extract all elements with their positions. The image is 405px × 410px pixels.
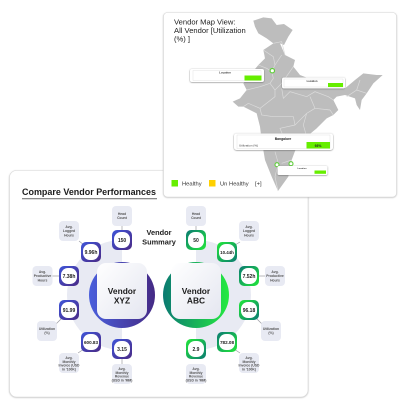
metric: monthly revenue XYZ: [112, 339, 132, 384]
vendor ABC hub: ABC: [187, 296, 205, 306]
metric: logged hours XYZ: 9.96h: [85, 250, 97, 256]
metric: head count XYZ: 150: [118, 238, 126, 244]
legend: [+]: [255, 182, 262, 188]
metric: logged hours ABC: Hours: [244, 233, 254, 237]
metric: logged hours ABC: 10.44h: [220, 250, 234, 255]
heading: vendor summary: Summary: [142, 238, 177, 246]
metric: utilization ABC: 96.18: [243, 308, 255, 314]
tooltip: south location: [278, 166, 328, 175]
connector lines: [52, 225, 266, 365]
metric: monthly invoice XYZ: 600.83: [84, 340, 98, 345]
map of India: [233, 17, 383, 191]
metric: logged hours ABC: Logged: [243, 229, 255, 233]
metric: utilization XYZ: Utilization: [39, 327, 55, 331]
legend: Un Healthy: [220, 182, 249, 188]
metric: monthly revenue ABC: [186, 339, 206, 384]
metric: productive hours XYZ: Hours: [38, 278, 48, 282]
metric: monthly revenue XYZ: 3.15: [117, 347, 127, 353]
metric: productive hours ABC: 7.52h: [243, 274, 255, 280]
metric: monthly invoice XYZ: Monthly: [62, 360, 76, 364]
heading: compare vendor performances: Compare Vendor Performances: [22, 187, 156, 198]
metric: monthly invoice ABC: 782.08: [220, 340, 234, 345]
heading: vendor map view: (%) ]: [174, 35, 190, 44]
metric: head count ABC: [186, 206, 206, 250]
tooltip: bangalore: Utilization (%): [239, 144, 258, 148]
metric: monthly revenue XYZ: Monthly: [116, 371, 129, 375]
metric: utilization ABC: (%): [268, 331, 274, 335]
metric: head count ABC: Head: [192, 212, 200, 216]
metric: monthly revenue XYZ: Avg.: [118, 367, 126, 371]
metric: productive hours ABC: Hours: [270, 278, 280, 282]
metric: monthly revenue ABC: Revenue: [189, 375, 203, 379]
panel: vendor map view: [164, 12, 396, 197]
tooltip: south location: Location: [297, 167, 307, 170]
metric: monthly revenue XYZ: Revenue: [115, 375, 129, 379]
metric: utilization XYZ: (%): [44, 331, 50, 335]
tooltip: location right: [282, 78, 345, 88]
metric: monthly revenue ABC: Avg.: [192, 367, 200, 371]
heading: vendor map view: Vendor Map View:: [174, 18, 236, 26]
panel: compare vendor performances: [10, 170, 308, 397]
metric: logged hours XYZ: Logged: [63, 229, 75, 233]
metric: utilization ABC: [239, 300, 281, 341]
metric: head count XYZ: [112, 206, 132, 250]
gear backdrop left: [67, 240, 122, 350]
metric: productive hours XYZ: 7.38h: [63, 274, 75, 280]
metric: utilization ABC: Utilization: [263, 327, 279, 331]
metric: monthly invoice XYZ: in '100K): [62, 367, 76, 371]
metric: monthly invoice ABC: in '100K): [242, 367, 256, 371]
metric: monthly invoice XYZ: Avg.: [65, 356, 73, 360]
tooltip: bangalore: Bangalore: [275, 137, 291, 141]
tooltip: location left: [190, 69, 264, 82]
metric: logged hours ABC: [217, 221, 259, 262]
metric: logged hours XYZ: [59, 221, 101, 262]
marker: north: [270, 68, 274, 73]
tooltip: bangalore: 93%: [315, 144, 321, 148]
vendor XYZ hub: [89, 262, 155, 328]
metric: logged hours ABC: Avg.: [245, 225, 253, 229]
metric: monthly revenue ABC: Monthly: [190, 371, 203, 375]
tooltip: bangalore: [234, 134, 333, 150]
legend: [172, 180, 262, 188]
metric: head count ABC: 50: [193, 238, 199, 244]
metric: monthly revenue ABC: (USD in 'MM): [186, 378, 206, 382]
metric: utilization XYZ: [37, 300, 79, 341]
metric: monthly invoice ABC: Invoice (USD: [239, 364, 260, 368]
metric: productive hours ABC: Productive: [266, 274, 284, 278]
tooltip: location left: Location: [219, 71, 231, 75]
vendor XYZ hub: XYZ: [114, 296, 130, 306]
gear backdrop right: [196, 240, 251, 350]
vendor XYZ hub: Vendor: [108, 286, 136, 296]
metric: productive hours XYZ: [32, 266, 79, 286]
metric: productive hours XYZ: Productive: [34, 274, 51, 278]
vendor ABC hub: [163, 262, 229, 328]
metric: productive hours XYZ: Avg.: [39, 270, 46, 274]
legend: Healthy: [182, 182, 202, 188]
tooltip: location right: Location: [307, 79, 318, 83]
metric: logged hours XYZ: Avg.: [65, 225, 73, 229]
metric: monthly invoice ABC: [217, 332, 260, 373]
metric: head count ABC: Count: [191, 216, 202, 220]
metric: utilization XYZ: 91.99: [63, 308, 75, 314]
vendor ABC hub: Vendor: [182, 286, 210, 296]
heading: vendor map view: All Vendor [Utilization: [174, 26, 246, 35]
markers: south: [275, 162, 293, 167]
metric: monthly revenue XYZ: (USD in 'MM): [112, 378, 132, 382]
metric: head count XYZ: Head: [118, 212, 126, 216]
metric: monthly invoice ABC: Avg.: [245, 356, 253, 360]
metric: productive hours ABC: Avg.: [271, 270, 279, 274]
metric: productive hours ABC: [239, 266, 285, 286]
metric: monthly invoice ABC: Monthly: [242, 360, 256, 364]
metric: monthly invoice XYZ: Invoice (USD: [59, 364, 80, 368]
metric: monthly revenue ABC: 2.9: [193, 347, 200, 353]
metric: head count XYZ: Count: [117, 216, 128, 220]
metric: logged hours XYZ: Hours: [64, 233, 74, 237]
heading: vendor summary: Vendor: [146, 228, 172, 237]
metric: monthly invoice XYZ: [59, 332, 101, 373]
